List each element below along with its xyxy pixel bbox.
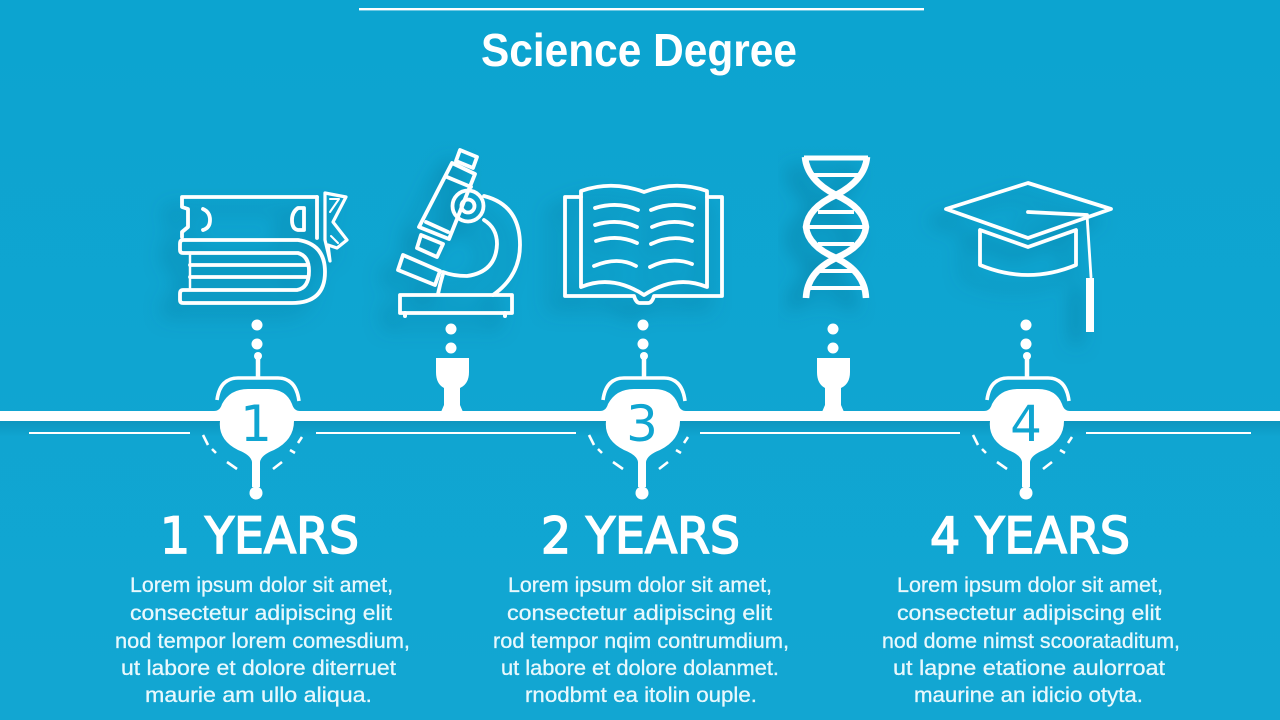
panel: 2 years: rod tempor nqim contrumdium,	[493, 630, 789, 653]
panel: 1 years: Lorem ipsum dolor sit amet,	[130, 574, 393, 597]
node 1	[203, 320, 302, 500]
panel: 1 years: maurie am ullo aliqua.	[145, 684, 372, 707]
icon: open book	[565, 186, 722, 303]
panel: 4 years: Lorem ipsum dolor sit amet,	[897, 574, 1163, 597]
panel: 2 years: consectetur adipiscing elit	[507, 602, 772, 625]
panel: 1 years: ut labore et dolore diterruet	[121, 657, 396, 680]
icon: microscope	[398, 150, 520, 316]
panel: 1 years: consectetur adipiscing elit	[130, 602, 392, 625]
panel: 4 years: consectetur adipiscing elit	[897, 602, 1161, 625]
icon: stacked books	[180, 193, 347, 303]
panel: 1 years: nod tempor lorem comesdium,	[115, 630, 410, 653]
node 1: 1	[240, 395, 272, 453]
node 4: 4	[1010, 395, 1042, 453]
node 4	[973, 320, 1072, 500]
panel: 4 years: nod dome nimst scoorataditum,	[882, 630, 1180, 653]
icon: graduation cap	[946, 183, 1111, 332]
title: Science Degree	[481, 24, 797, 76]
connector: microscope stem	[436, 324, 469, 412]
panel: 4 years: 4 YEARS	[930, 507, 1130, 565]
panel: 1 years: 1 YEARS	[160, 507, 359, 565]
node 3: 3	[626, 395, 658, 453]
panel: 4 years	[882, 507, 1180, 707]
connector: DNA stem	[817, 324, 850, 412]
panel: 4 years: maurine an idicio otyta.	[914, 684, 1143, 707]
panel: 2 years: Lorem ipsum dolor sit amet,	[508, 574, 772, 597]
panel: 2 years: 2 YEARS	[541, 507, 740, 565]
icon: DNA helix	[804, 157, 868, 298]
node 3	[589, 320, 688, 500]
panel: 2 years: rnodbmt ea itolin ouple.	[525, 684, 757, 707]
panel: 1 years	[115, 507, 410, 707]
panel: 2 years	[493, 507, 789, 707]
timeline bar	[0, 411, 1280, 434]
panel: 4 years: ut lapne etatione aulorroat	[893, 657, 1165, 680]
panel: 2 years: ut labore et dolore dolanmet.	[501, 657, 779, 680]
